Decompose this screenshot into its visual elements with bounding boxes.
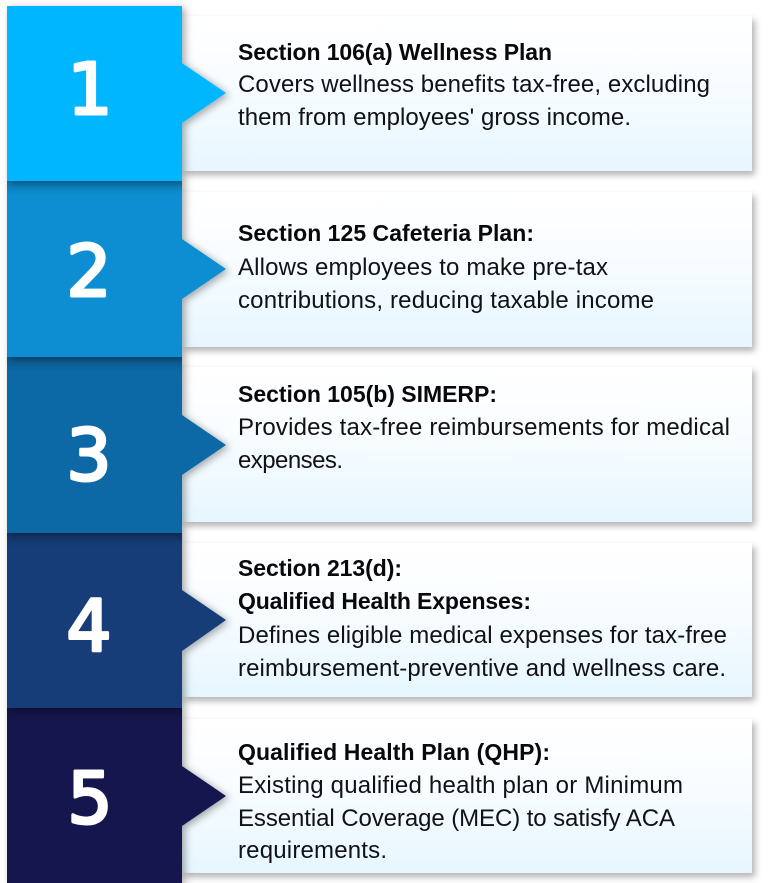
number block 1: 1 bbox=[67, 48, 113, 131]
panel: Section 125 Cafeteria Plan: Section 125 Cafeteria Plan: bbox=[238, 220, 534, 246]
panel: Section 106(a) Wellness Plan: Covers wellness benefits tax-free, excluding bbox=[238, 71, 710, 98]
panel: Section 125 Cafeteria Plan bbox=[182, 192, 752, 347]
panel: Section 106(a) Wellness Plan bbox=[182, 16, 752, 171]
panel: Qualified Health Plan (QHP): Essential Coverage (MEC) to satisfy ACA bbox=[238, 805, 675, 832]
panel: Section 213(d) Qualified Health Expenses: Section 213(d): bbox=[238, 555, 402, 581]
panel: Section 106(a) Wellness Plan: them from employees' gross income. bbox=[238, 104, 631, 131]
panel: Section 105(b) SIMERP: expenses. bbox=[238, 447, 343, 474]
number block 3 bbox=[7, 357, 226, 533]
panel: Section 213(d) Qualified Health Expenses: Defines eligible medical expenses for tax-free bbox=[238, 622, 727, 649]
panel: Qualified Health Plan (QHP): Existing qualified health plan or Minimum bbox=[238, 772, 683, 799]
number block 1 bbox=[7, 6, 226, 181]
panel: Section 105(b) SIMERP: Provides tax-free reimbursements for medical bbox=[238, 414, 730, 441]
panel: Section 213(d) Qualified Health Expenses bbox=[182, 543, 752, 697]
panel: Qualified Health Plan (QHP): requirements. bbox=[238, 837, 387, 864]
number block 2 bbox=[7, 181, 226, 357]
panel: Qualified Health Plan (QHP): Qualified Health Plan (QHP): bbox=[238, 739, 550, 765]
panel: Section 125 Cafeteria Plan: Allows employees to make pre-tax bbox=[238, 254, 608, 281]
number block 5: 5 bbox=[67, 757, 113, 840]
panel: Section 213(d) Qualified Health Expenses: Qualified Health Expenses: bbox=[238, 588, 531, 614]
panel: Section 125 Cafeteria Plan: contributions, reducing taxable income bbox=[238, 287, 654, 314]
number block 3: 3 bbox=[66, 414, 112, 497]
panel: Qualified Health Plan (QHP) bbox=[182, 719, 752, 873]
panel: Section 105(b) SIMERP bbox=[182, 367, 752, 522]
panel: Section 106(a) Wellness Plan: Section 106(a) Wellness Plan bbox=[238, 39, 552, 65]
panel: Section 105(b) SIMERP: Section 105(b) SIMERP: bbox=[238, 381, 497, 407]
number block 5 bbox=[7, 708, 226, 883]
number block 2: 2 bbox=[66, 230, 112, 313]
panel: Section 213(d) Qualified Health Expenses: reimbursement-preventive and wellness care. bbox=[238, 655, 726, 682]
number block 4 bbox=[7, 533, 226, 708]
number block 4: 4 bbox=[66, 585, 112, 668]
